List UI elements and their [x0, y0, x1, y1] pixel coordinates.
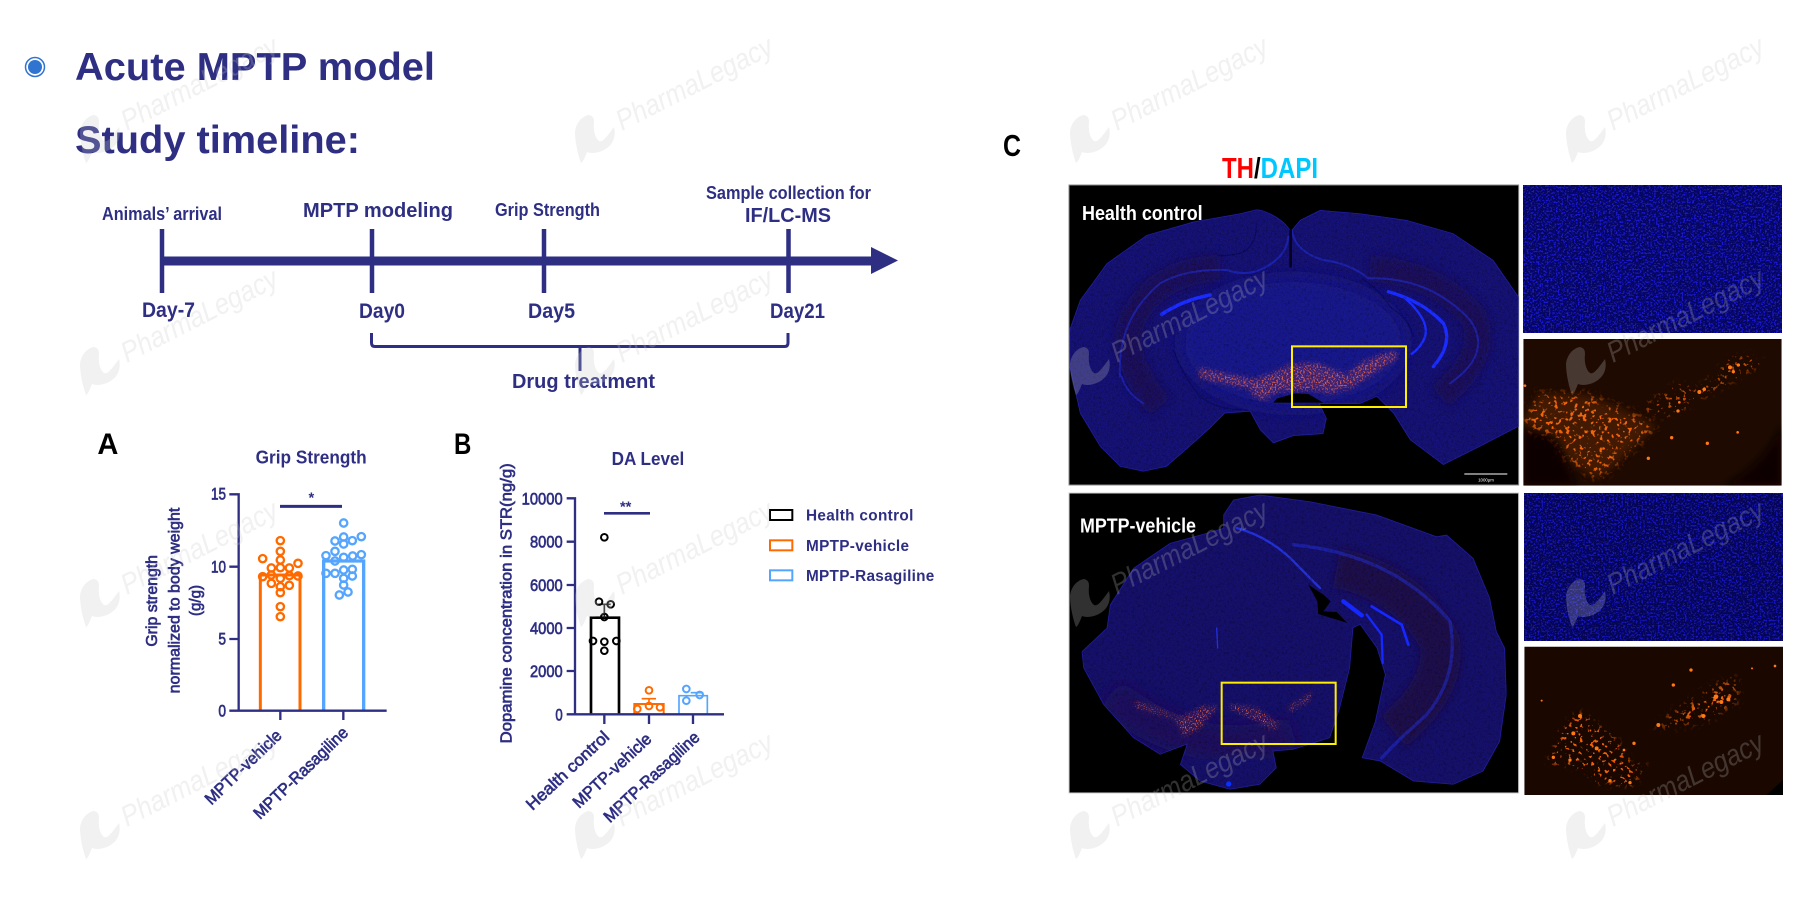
TH positive region	[1198, 351, 1398, 400]
PharmaLegacy watermark overlay: PharmaLegacy	[1106, 494, 1275, 601]
significance bar	[604, 509, 650, 517]
chart title: Grip Strength	[256, 446, 367, 467]
TH positive region	[1135, 691, 1313, 736]
significance star: *	[308, 490, 314, 506]
blue data points	[683, 686, 703, 704]
PharmaLegacy watermark overlay: PharmaLegacy	[611, 494, 780, 601]
sample label: Health control	[1082, 203, 1203, 225]
timeline axis arrow	[162, 247, 898, 274]
sample label: MPTP-vehicle	[1080, 516, 1196, 538]
event labels: IF/LC-MS	[745, 205, 831, 227]
TH neurons	[1548, 712, 1647, 785]
day labels: Day21	[770, 300, 825, 323]
event labels: Sample collection for	[706, 182, 871, 203]
day labels: Day0	[359, 300, 405, 323]
yellow region box	[1292, 346, 1406, 407]
x labels: MPTP-vehicle	[201, 726, 286, 809]
PharmaLegacy watermark overlay: PharmaLegacy	[1602, 30, 1771, 137]
y tick labels: 10	[211, 557, 226, 576]
blue bar	[324, 561, 364, 711]
panel C: health control whole-brain image	[1067, 185, 1520, 485]
panel C: MPTP-vehicle TH tile	[1524, 647, 1783, 795]
PharmaLegacy watermark overlay: PharmaLegacy	[611, 262, 780, 369]
brain section	[1067, 207, 1520, 477]
day labels: Day5	[528, 300, 575, 323]
panel A: grip strength bar chart	[97, 428, 387, 823]
panel C: MPTP-vehicle whole-brain image	[1067, 491, 1520, 793]
ventral gap	[1273, 393, 1323, 403]
orange data points	[259, 537, 302, 620]
PharmaLegacy watermark overlay: PharmaLegacy	[116, 30, 285, 137]
y tick labels: 5	[218, 630, 226, 649]
y tick labels: 4000	[530, 619, 563, 638]
yellow region box	[1222, 683, 1336, 744]
orange bar	[634, 704, 664, 714]
brain outline	[1082, 495, 1507, 790]
legend	[770, 508, 934, 585]
PharmaLegacy watermark overlay: PharmaLegacy	[611, 726, 780, 833]
panel C: health control DAPI tile	[1523, 185, 1782, 333]
x labels: Health control	[522, 727, 613, 814]
y axis title: (g/g)	[188, 585, 205, 616]
y axis title: Grip strength	[144, 555, 161, 647]
TH/DAPI stain legend: TH/DAPI	[1222, 153, 1318, 185]
PharmaLegacy watermark overlay: PharmaLegacy	[116, 494, 285, 601]
bright blue spot	[1226, 781, 1231, 787]
midline fissure	[1287, 230, 1295, 267]
panel letter A: A	[97, 428, 118, 461]
axes	[567, 498, 724, 724]
panel B: DA level bar chart	[454, 428, 934, 826]
title: Acute MPTP model: Acute MPTP model	[75, 46, 435, 89]
PharmaLegacy watermark overlay: PharmaLegacy	[611, 30, 780, 137]
event labels	[102, 182, 871, 227]
brain outline	[1069, 209, 1519, 472]
y tick labels: 10000	[522, 489, 563, 508]
bullet icon	[26, 58, 44, 76]
PharmaLegacy watermark overlay: PharmaLegacy	[1602, 726, 1771, 833]
TH neurons	[1525, 393, 1657, 478]
day labels: Day-7	[142, 299, 195, 322]
PharmaLegacy watermark overlay: PharmaLegacy	[1106, 30, 1275, 137]
drug treatment bracket	[372, 333, 788, 371]
event labels: MPTP modeling	[303, 200, 453, 222]
black bar	[591, 618, 619, 714]
x labels: MPTP-vehicle	[569, 729, 655, 812]
y tick labels: 0	[218, 701, 226, 720]
panel C: MPTP-vehicle DAPI tile	[1524, 493, 1783, 641]
black data points	[590, 534, 620, 654]
y tick labels: 8000	[530, 533, 563, 552]
drug treatment label: Drug treatment	[512, 371, 655, 393]
y tick labels: 15	[211, 485, 226, 504]
x labels	[522, 727, 703, 826]
PharmaLegacy watermark overlay: PharmaLegacy	[1602, 262, 1771, 369]
ventricle bright bands	[1343, 601, 1408, 663]
legend: Health control	[806, 508, 913, 525]
x labels	[201, 723, 352, 823]
orange data points	[634, 687, 663, 712]
PharmaLegacy watermark overlay: PharmaLegacy	[116, 262, 285, 369]
heading: Study timeline: Study timeline:	[75, 119, 360, 162]
significance bar	[280, 502, 342, 511]
PharmaLegacy watermark overlay: PharmaLegacy	[1106, 262, 1275, 369]
hippocampus bright bands	[1162, 292, 1447, 367]
axes	[229, 494, 387, 720]
y axis title: Dopamine concentration in STR(ng/g)	[499, 463, 516, 743]
event labels: Grip Strength	[495, 199, 600, 220]
day labels	[142, 299, 825, 323]
y axis title: normalized to body weight	[166, 507, 183, 693]
y tick labels: 0	[555, 705, 563, 724]
orange bar	[260, 575, 300, 711]
blue data points	[322, 519, 365, 599]
panel letter C: C	[1003, 128, 1021, 163]
x labels: MPTP-Rasagiline	[250, 723, 352, 823]
panel C: health control TH tile	[1523, 339, 1782, 486]
legend: MPTP-Rasagiline	[806, 568, 934, 585]
y tick labels: 6000	[530, 576, 563, 595]
ventricle gap	[1308, 585, 1347, 623]
timeline tick marks	[162, 229, 788, 293]
chart title: DA Level	[612, 448, 684, 469]
PharmaLegacy watermark overlay: PharmaLegacy	[116, 726, 285, 833]
y tick labels	[211, 485, 226, 720]
brain section	[1067, 491, 1520, 791]
significance stars: **	[620, 499, 632, 515]
PharmaLegacy watermark overlay: PharmaLegacy	[1106, 726, 1275, 833]
y tick labels: 2000	[530, 662, 563, 681]
legend: MPTP-vehicle	[806, 538, 909, 555]
blue bar	[679, 696, 707, 714]
scale label: 1000μm	[1478, 478, 1494, 483]
PharmaLegacy watermark overlay: PharmaLegacy	[1602, 494, 1771, 601]
y axis title	[144, 507, 205, 693]
event labels: Animals’ arrival	[102, 204, 222, 224]
panel letter B: B	[454, 428, 471, 461]
error bars	[598, 604, 703, 704]
y tick labels	[522, 489, 563, 724]
study timeline diagram	[102, 182, 898, 393]
scale bar	[1464, 472, 1507, 475]
x labels: MPTP-Rasagiline	[600, 728, 703, 826]
